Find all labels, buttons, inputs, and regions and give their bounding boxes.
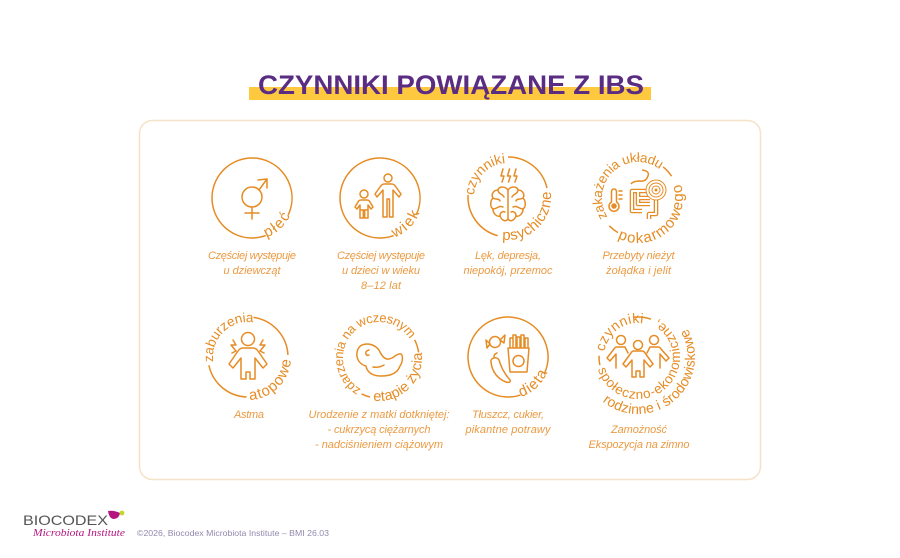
icon: candy, fries, chili — [486, 335, 529, 382]
caption: zakażenia układu pokarmowego — [602, 250, 675, 277]
icon: adult and child — [355, 174, 401, 218]
badge: wiek: wiek — [391, 210, 420, 237]
badge: zdarzenia na wczesnym etapie życia: etapie życia — [374, 352, 422, 402]
badge: zakażenia układu pokarmowego — [592, 152, 686, 244]
icon: gender symbol — [242, 179, 267, 219]
badge: czynniki psychiczne — [467, 153, 552, 243]
caption: wiek — [337, 250, 425, 292]
caption: wiek: 8–12 lat — [361, 280, 402, 292]
factor: dieta — [464, 316, 552, 436]
badge: zakażenia układu pokarmowego: zakażenia układu — [592, 152, 663, 220]
badge: płeć: płeć — [264, 211, 290, 240]
factor: czynniki psychiczne — [464, 153, 553, 277]
panel: factors — [140, 120, 760, 480]
caption: czynniki społeczno-ekonomiczne — [588, 424, 690, 451]
badge: czynniki społeczno-ekonomiczne: społeczno-ekonomiczne, — [598, 319, 680, 400]
caption: dieta — [464, 409, 552, 436]
caption: wiek: u dzieci w wieku — [342, 265, 420, 277]
icon: brain — [491, 169, 525, 221]
footer credit: ©2026, Biocodex Microbiota Institute – BMI 26.03 — [137, 528, 329, 538]
caption: czynniki społeczno-ekonomiczne: Ekspozycja na zimno — [588, 439, 690, 451]
caption: dieta: pikantne potrawy — [464, 424, 552, 436]
factor: wiek — [337, 157, 425, 292]
logo: Biocodex Microbiota Institute: BIOCODEX — [23, 512, 109, 528]
caption: wiek: Częściej występuje — [337, 250, 425, 262]
caption: zakażenia układu pokarmowego: Przebyty nieżyt — [602, 250, 675, 262]
factor: zaburzenia atopowe — [205, 312, 291, 421]
caption: czynniki społeczno-ekonomiczne: Zamożność — [610, 424, 668, 436]
factor: czynniki społeczno-ekonomiczne — [588, 313, 695, 451]
icon: thermometer — [609, 189, 622, 211]
logo: Biocodex Microbiota Institute — [23, 511, 125, 539]
factor: zdarzenia na wczesnym etapie życia — [308, 315, 450, 451]
badge: czynniki psychiczne: czynniki — [467, 153, 504, 194]
caption: zaburzenia atopowe: Astma — [233, 409, 264, 421]
factor: zakażenia układu pokarmowego — [592, 152, 686, 277]
badge: dieta: dieta — [519, 370, 548, 396]
badge: zaburzenia atopowe: atopowe — [250, 360, 291, 400]
badge: wiek — [339, 157, 421, 239]
icon: embryo — [357, 344, 402, 376]
caption: zakażenia układu pokarmowego: żołądka i jelit — [605, 265, 672, 277]
icon: intestines with target — [631, 170, 666, 219]
caption: płeć: u dziewcząt — [224, 265, 281, 277]
badge: czynniki społeczno-ekonomiczne: rodzinne i środowiskowe — [603, 330, 695, 414]
logo: Biocodex Microbiota Institute: Microbiota Institute — [32, 527, 125, 539]
badge: zaburzenia atopowe — [205, 312, 291, 400]
badge: zakażenia układu pokarmowego: pokarmowego — [617, 185, 686, 244]
caption: płeć: Częściej występuje — [208, 250, 296, 262]
caption: czynniki psychiczne: niepokój, przemoc — [464, 265, 553, 277]
badge: zaburzenia atopowe: zaburzenia — [205, 312, 254, 362]
title: CZYNNIKI POWIĄZANE Z IBS — [258, 70, 644, 100]
icon: person with irritation — [229, 332, 267, 379]
caption: czynniki psychiczne: Lęk, depresja, — [475, 250, 541, 262]
badge: czynniki społeczno-ekonomiczne: czynniki — [598, 313, 643, 350]
caption: zdarzenia na wczesnym etapie życia: Urodzenie z matki dotkniętej: — [308, 409, 450, 421]
icon: family — [607, 336, 669, 377]
caption: zdarzenia na wczesnym etapie życia — [308, 409, 450, 451]
factor: płeć — [208, 157, 296, 277]
caption: czynniki psychiczne — [464, 250, 553, 277]
caption: zdarzenia na wczesnym etapie życia: - nadciśnieniem ciążowym — [315, 439, 443, 451]
badge: zdarzenia na wczesnym etapie życia: zdarzenia na wczesnym — [334, 315, 414, 395]
caption: dieta: Tłuszcz, cukier, — [472, 409, 544, 421]
caption: płeć — [208, 250, 296, 277]
caption: zdarzenia na wczesnym etapie życia: - cukrzycą ciężarnych — [328, 424, 430, 436]
badge: czynniki psychiczne: psychiczne — [503, 192, 552, 243]
